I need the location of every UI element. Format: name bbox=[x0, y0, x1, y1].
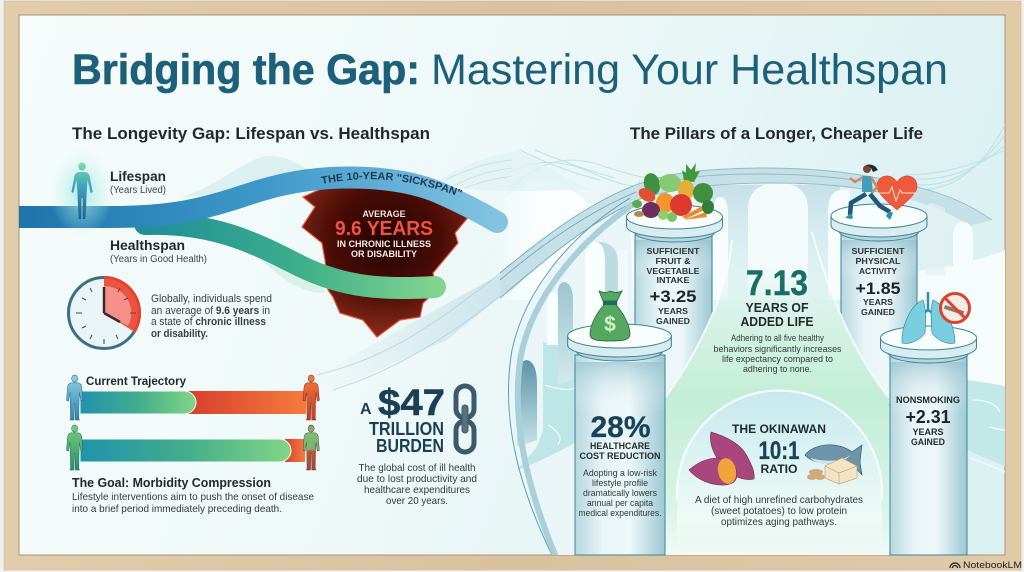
center stat: 7.13 years: adhering to none. bbox=[743, 364, 812, 375]
clock caption: a state of chronic illness bbox=[151, 316, 266, 328]
pillar: physical activity bbox=[831, 165, 927, 405]
burden description bbox=[357, 463, 477, 507]
okinawan description: optimizes aging pathways. bbox=[721, 517, 837, 528]
pillar text: HEALTHCARE bbox=[590, 441, 650, 451]
center stat: 7.13 years: 7.13 bbox=[746, 264, 808, 303]
lifespan band bbox=[5, 178, 497, 222]
burden figure: A bbox=[360, 401, 372, 418]
icon: no smoking bbox=[940, 294, 970, 322]
burden figure: TRILLION bbox=[369, 419, 444, 439]
clock caption bbox=[151, 293, 272, 340]
panel: okinawan ratio: 10:1 bbox=[758, 437, 800, 465]
center stat: 7.13 years: YEARS OF bbox=[746, 300, 809, 315]
burden figure bbox=[360, 382, 445, 456]
pillar text: GAINED bbox=[911, 437, 945, 447]
icon: human figure bbox=[50, 148, 114, 236]
icon: healthy person goal bbox=[66, 425, 83, 470]
icon: sweet potatoes bbox=[689, 432, 754, 486]
okinawan description bbox=[695, 495, 863, 528]
icon: sick person current bbox=[303, 375, 319, 420]
pillar text: NONSMOKING bbox=[896, 395, 960, 405]
lifespan label bbox=[110, 168, 166, 196]
icon: chain bbox=[456, 386, 474, 452]
burden description: The global cost of ill health bbox=[358, 463, 476, 474]
center stat: 7.13 years bbox=[714, 264, 842, 375]
icon: clock bbox=[68, 278, 140, 348]
burden figure: BURDEN bbox=[376, 436, 444, 456]
goal text: The Goal: Morbidity Compression bbox=[72, 476, 271, 490]
center stat: 7.13 years: life expectancy compared to bbox=[722, 354, 833, 365]
pillar text: medical expenditures. bbox=[578, 508, 662, 518]
sickspan badge: AVERAGE bbox=[362, 209, 406, 220]
burden description: healthcare expenditures bbox=[364, 485, 470, 496]
pillar text: 28% bbox=[590, 411, 650, 444]
healthspan label bbox=[110, 237, 207, 265]
pillar: fruit and vegetable bbox=[626, 163, 722, 405]
sickspan badge: IN CHRONIC ILLNESS bbox=[337, 239, 431, 250]
pillar text: PHYSICAL bbox=[856, 256, 900, 266]
icon: older person goal bbox=[303, 425, 319, 470]
pillar text: INTAKE bbox=[656, 275, 690, 285]
icon: lungs bbox=[902, 292, 955, 343]
icon: vegetables bbox=[632, 163, 714, 222]
healthspan label: Healthspan bbox=[110, 237, 185, 253]
pillar text: VEGETABLE bbox=[646, 266, 700, 276]
healthspan band bbox=[145, 224, 435, 288]
pillar: healthcare cost reduction bbox=[568, 291, 671, 555]
okinawan description: A diet of high unrefined carbohydrates bbox=[695, 495, 863, 506]
pillar text bbox=[646, 246, 700, 326]
bar: goal bbox=[80, 439, 305, 462]
pillar text: YEARS bbox=[912, 427, 944, 437]
current trajectory label: Current Trajectory bbox=[86, 376, 187, 388]
panel: morbidity compression bars bbox=[66, 375, 319, 515]
pillar text: +1.85 bbox=[856, 279, 900, 298]
title: Bridging the Gap: bbox=[72, 46, 420, 94]
title bbox=[72, 46, 948, 94]
title: Mastering Your Healthspan bbox=[431, 46, 948, 94]
panel: okinawan ratio bbox=[677, 391, 882, 555]
clock caption: Globally, individuals spend bbox=[151, 293, 272, 305]
clock caption: an average of 9.6 years in bbox=[151, 305, 270, 317]
lifespan label: Lifespan bbox=[110, 168, 166, 184]
icon: healthy person current bbox=[66, 375, 83, 420]
icon: money bag: $ bbox=[604, 313, 616, 336]
sickspan label: THE 10-YEAR "SICKSPAN" bbox=[320, 172, 462, 195]
goal text: Lifestyle interventions aim to push the onset of disease bbox=[72, 492, 314, 503]
pillar text: dramatically lowers bbox=[583, 488, 658, 498]
burden description: over 20 years. bbox=[386, 496, 448, 507]
pillar text bbox=[896, 395, 960, 447]
pillar text: Adopting a low-risk bbox=[583, 468, 658, 478]
lifespan label: (Years Lived) bbox=[110, 185, 166, 196]
pillar text: lifestyle profile bbox=[592, 478, 648, 488]
burden figure: $47 bbox=[378, 382, 445, 423]
pillar text: GAINED bbox=[656, 316, 690, 326]
heading: longevity gap: The Longevity Gap: Lifespan vs. Healthspan bbox=[72, 124, 430, 143]
sickspan badge: OR DISABILITY bbox=[351, 249, 418, 260]
panel: 47 trillion burden bbox=[357, 382, 477, 507]
pillar text: SUFFICIENT bbox=[646, 246, 700, 256]
okinawan description: (sweet potatoes) to low protein bbox=[711, 506, 847, 517]
pillar text: SUFFICIENT bbox=[852, 246, 905, 256]
pillar text bbox=[852, 246, 905, 317]
center stat: 7.13 years: ADDED LIFE bbox=[740, 314, 814, 329]
pillar text: YEARS bbox=[658, 306, 688, 316]
pillar text: annual per capita bbox=[587, 498, 653, 508]
notebooklm watermark: NotebookLM bbox=[963, 560, 1022, 571]
pillar: nonsmoking bbox=[880, 292, 976, 555]
pillar text: +2.31 bbox=[906, 407, 950, 427]
clock caption: or disability. bbox=[151, 328, 208, 340]
pillar text: COST REDUCTION bbox=[580, 451, 660, 461]
icon: runner bbox=[845, 165, 893, 220]
sickspan badge bbox=[302, 180, 470, 337]
pillar text: FRUIT & bbox=[656, 256, 690, 266]
panel: okinawan ratio: THE OKINAWAN bbox=[732, 422, 826, 436]
icon: fish bbox=[805, 445, 862, 475]
pillar text bbox=[578, 411, 662, 518]
center stat: 7.13 years: behaviors significantly increases bbox=[714, 344, 842, 355]
bar: current trajectory bbox=[80, 391, 306, 414]
pillar text: +3.25 bbox=[650, 287, 696, 306]
heading: pillars: The Pillars of a Longer, Cheaper Life bbox=[630, 124, 923, 143]
icon: heart bbox=[875, 176, 917, 210]
burden description: due to lost productivity and bbox=[357, 474, 477, 485]
panel: okinawan ratio: RATIO bbox=[760, 462, 798, 476]
background bridge and waves bbox=[317, 125, 1005, 557]
icon: money bag bbox=[590, 291, 630, 341]
pillar text: ACTIVITY bbox=[859, 266, 897, 276]
goal text: into a brief period immediately preceding death. bbox=[72, 504, 282, 515]
pillar text: GAINED bbox=[861, 307, 895, 317]
sickspan badge: 9.6 YEARS bbox=[335, 218, 433, 240]
pillar text: YEARS bbox=[863, 297, 893, 307]
goal text bbox=[72, 476, 314, 515]
panel: longevity gap chart bbox=[19, 150, 572, 338]
center stat: 7.13 years: Adhering to all five healthy bbox=[731, 333, 824, 344]
healthspan label: (Years in Good Health) bbox=[110, 254, 207, 265]
icon: tofu and beans bbox=[807, 458, 857, 484]
panel: center green bell bbox=[665, 227, 889, 555]
